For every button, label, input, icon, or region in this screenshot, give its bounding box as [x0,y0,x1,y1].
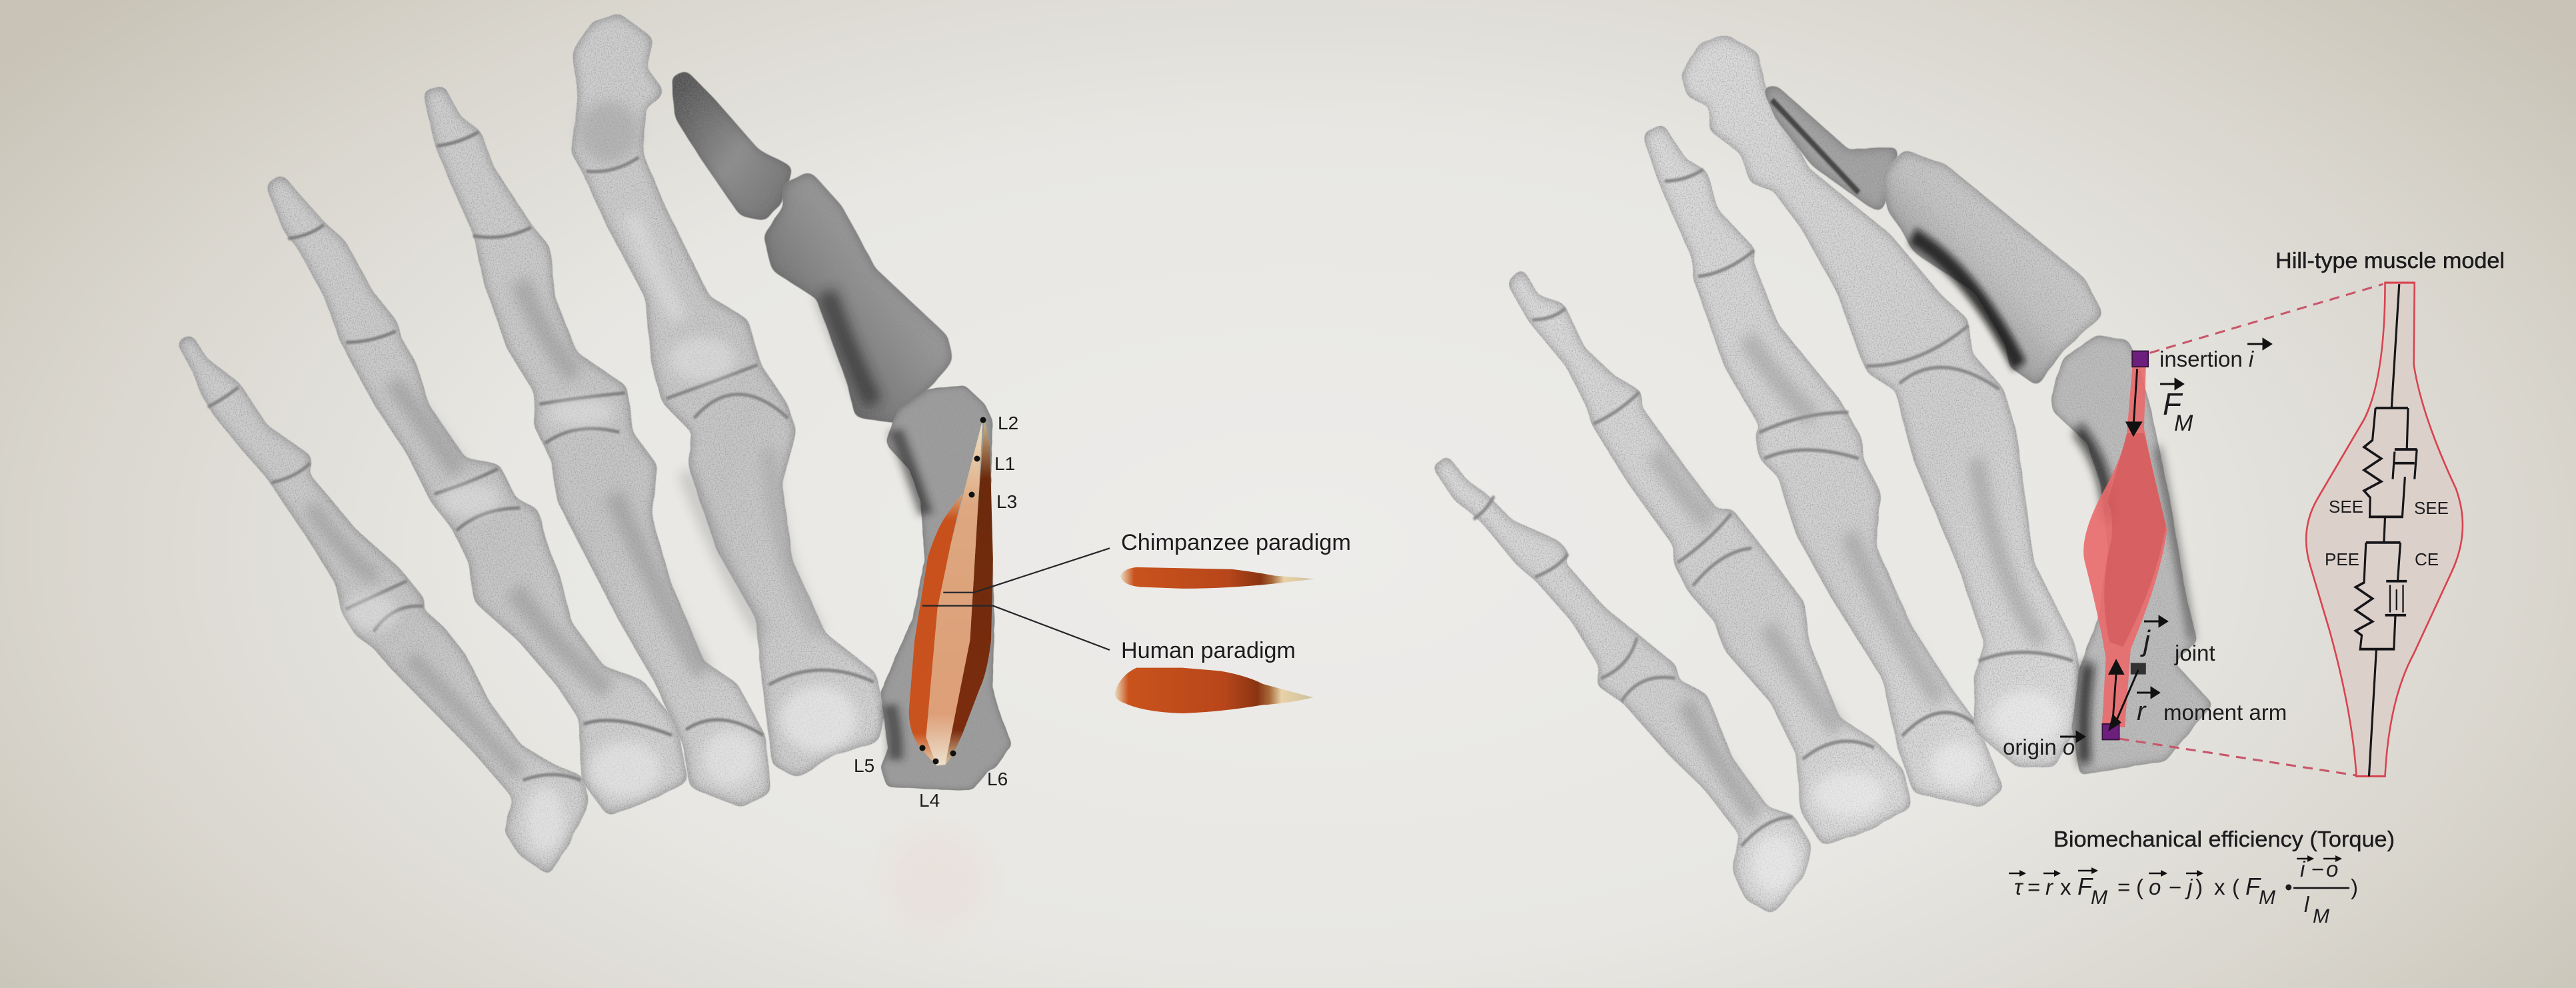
Hill-type muscle outline [2306,283,2463,776]
torque equation: − [2311,857,2324,881]
torque equation [2009,857,2358,927]
right thumb metacarpal with overlay [2052,283,2463,776]
fraction bar and arrows [2009,859,2349,888]
Hill element labels [2325,497,2449,569]
torque equation: − [2169,875,2181,899]
thumb proximal phalanx [1884,152,2101,383]
torque equation: F [2245,873,2261,900]
thumb distal phalanx [674,73,791,219]
left thumb metacarpal [882,387,1315,789]
torque equation: ) [2195,875,2203,899]
j label: j [2140,625,2151,657]
torque equation: M [2091,887,2107,909]
thumb distal phalanx [1764,89,1897,210]
joint label: joint [2174,641,2215,665]
torque equation: o [2149,875,2161,899]
dark shadow of base [890,430,926,760]
torque equation: ( [2136,875,2143,899]
digit IV bones [1508,271,1910,843]
digit V bones [179,337,587,873]
torque equation: M [2313,905,2329,927]
force label: F [2163,387,2183,421]
Hill element labels: CE [2415,549,2439,569]
origin marker [2102,724,2119,739]
vector arrows above symbols [2060,339,2271,741]
torque equation: i [2300,857,2306,881]
Hill element labels: PEE [2325,549,2359,569]
torque equation: τ [2014,875,2024,899]
force label [2163,387,2193,436]
landmark labels: L5 [854,755,874,776]
heading: Biomechanical efficiency (Torque): Biomechanical efficiency (Torque) [2053,827,2395,851]
torque equation: = [2117,875,2130,899]
torque equation: = [2027,875,2040,899]
digit III bones [1644,126,2001,805]
landmark labels: L2 [998,413,1018,433]
Hill element labels: SEE [2414,498,2449,518]
digit II bones [1683,37,2083,765]
Hill model circuit [2355,284,2417,776]
landmark labels: L3 [996,491,1017,512]
force arrows [2109,369,2142,731]
torque equation: M [2259,887,2275,909]
torque equation: j [2185,875,2193,899]
Hill element labels: SEE [2329,497,2363,517]
origin label: origin o [2003,735,2075,759]
torque equation: x [2214,875,2225,899]
digit III bones [425,87,768,805]
torque equation: ( [2232,875,2239,899]
torque equation: l [2304,892,2310,917]
cross-section lines [922,548,1110,650]
r label: r [2137,697,2147,726]
insertion marker [2132,351,2148,367]
right hand skeleton [1434,37,2101,913]
label: Chimpanzee paradigm: Chimpanzee paradigm [1121,530,1351,555]
thumb proximal phalanx [766,174,951,421]
chimpanzee muscle cross-section [1120,567,1315,589]
torque equation: ) [2351,875,2358,899]
vector labels on the right bone [2003,347,2287,759]
landmark labels [854,413,1018,811]
torque equation: r [2045,875,2054,899]
muscle: three heads [909,420,993,766]
landmark labels: L6 [987,769,1008,789]
label: Human paradigm: Human paradigm [1121,638,1296,663]
torque equation: F [2077,873,2093,900]
left hand skeleton [179,16,951,873]
force label: M [2174,411,2193,436]
faint screen reflection [883,828,990,935]
torque equation: x [2060,875,2071,899]
digit IV bones [267,177,686,814]
digit V bones [1434,459,1810,913]
torque equation: o [2326,857,2338,881]
digit II bones [573,16,884,776]
muscle overlay [2083,365,2167,727]
landmark points [920,417,986,764]
label: Hill-type muscle model: Hill-type muscle model [2275,248,2505,273]
insertion label: insertion i [2159,347,2255,371]
human muscle cross-section [1114,668,1313,713]
landmark labels: L1 [994,453,1015,474]
moment arm label: moment arm [2163,700,2287,725]
torque equation: • [2285,875,2293,899]
landmark labels: L4 [919,790,940,811]
dashed zoom lines [2119,284,2383,775]
joint marker [2131,663,2146,675]
